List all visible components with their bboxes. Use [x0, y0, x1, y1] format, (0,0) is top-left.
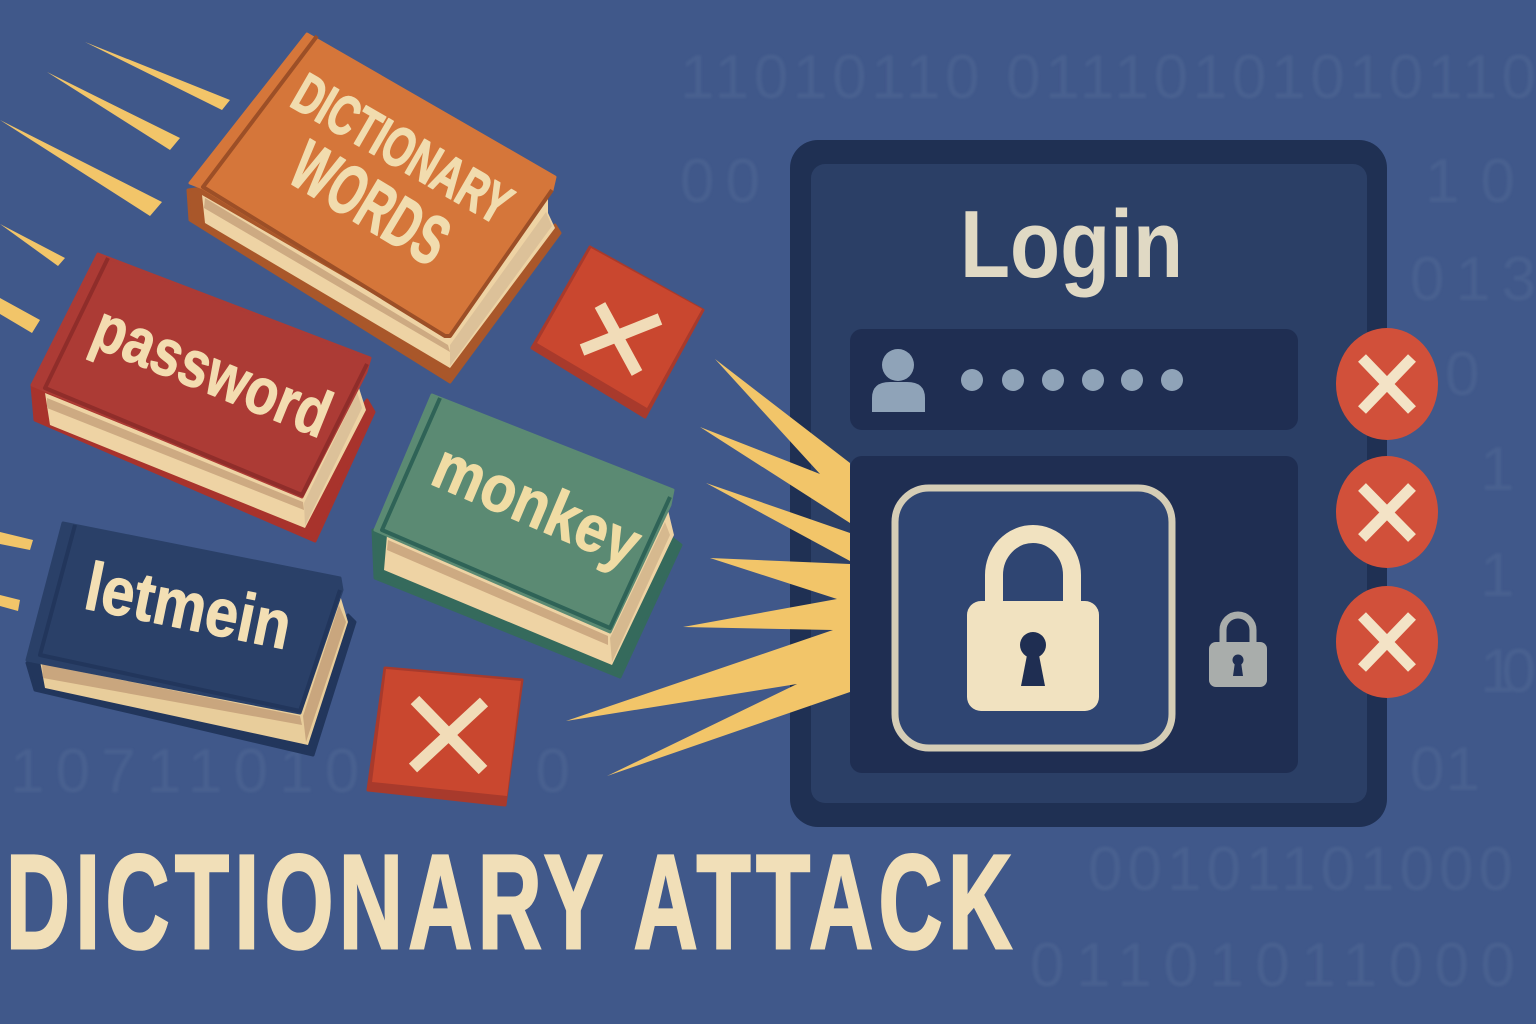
- book: monkey: monkey: [423, 428, 652, 581]
- background binary digits: 01: [1410, 735, 1480, 804]
- icon: large padlock: [967, 534, 1099, 711]
- book: monkey: [373, 395, 681, 677]
- login heading: Login: [960, 191, 1183, 298]
- failed attempt marker 1: [1336, 328, 1438, 440]
- lock area: [850, 456, 1298, 773]
- book: password: [32, 254, 374, 541]
- book: dictionary words: [188, 34, 560, 382]
- password field: [850, 329, 1298, 430]
- red x card lower: [368, 668, 522, 805]
- book: dictionary words: WORDS: [277, 126, 463, 280]
- failed attempt marker 3: [1336, 586, 1438, 698]
- background binary digits: 10: [1425, 147, 1515, 216]
- background binary digits: 01101011000: [1030, 931, 1515, 1000]
- icon: small padlock: [1209, 615, 1267, 687]
- background binary digits: 00: [680, 147, 760, 216]
- book: letmein: [27, 523, 355, 755]
- background binary digits: 1: [1480, 541, 1514, 610]
- red x card upper: [532, 247, 703, 417]
- background binary digits: 10: [1480, 637, 1536, 706]
- title: DICTIONARY ATTACK: [6, 828, 1012, 978]
- book: password: password: [83, 289, 342, 452]
- login panel: [790, 140, 1387, 827]
- background binary digits: 10711010161 0: [10, 737, 570, 806]
- background binary digits: 1: [1480, 435, 1514, 504]
- background binary digits: 0: [1445, 340, 1479, 409]
- impact burst: [566, 359, 850, 776]
- background binary digits: 11010110 01110101010110: [680, 43, 1536, 112]
- speed lines: [0, 42, 230, 611]
- failed attempt marker 2: [1336, 456, 1438, 568]
- background binary digits: 013: [1410, 245, 1536, 314]
- book: dictionary words: DICTIONARY: [282, 61, 523, 236]
- book: letmein: letmein: [79, 548, 298, 664]
- background binary digits: 00101101000: [1088, 835, 1513, 904]
